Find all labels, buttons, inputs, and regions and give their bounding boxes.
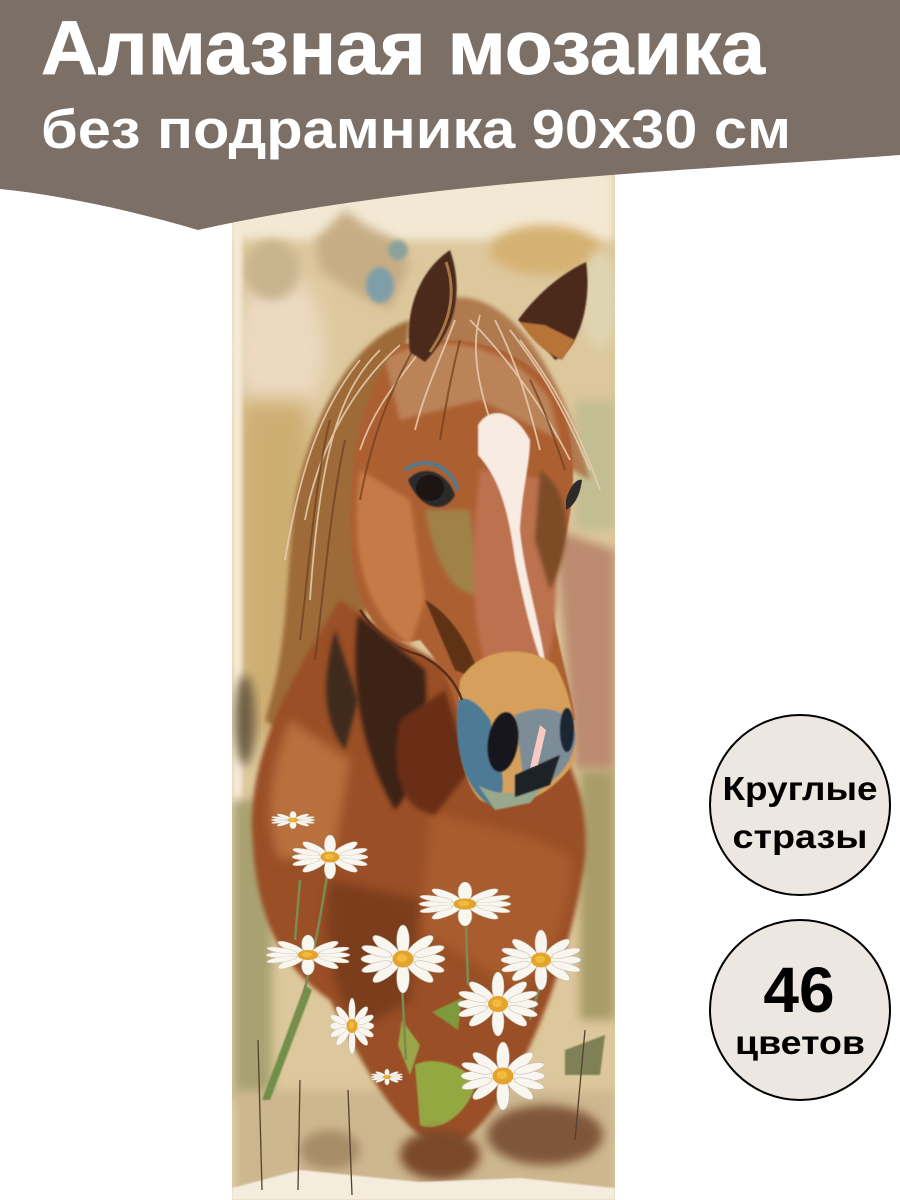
blaze	[478, 413, 547, 675]
badge: 46 colours: 46	[763, 954, 835, 1026]
left ear	[409, 250, 457, 362]
nostrils and mouth	[486, 711, 520, 773]
jaw line	[360, 610, 462, 700]
badge: 46 colours	[710, 920, 890, 1100]
foliage	[262, 985, 605, 1127]
painting background washes	[232, 170, 618, 1200]
title: Алмазная мозаика	[41, 6, 766, 91]
dark neck shadow	[355, 615, 426, 810]
right ear	[518, 262, 588, 360]
hair strands	[285, 315, 600, 600]
daisies	[265, 811, 582, 1110]
badge: round rhinestones: Круглые	[722, 770, 878, 807]
badge: 46 colours: цветов	[735, 1024, 865, 1061]
horse body	[252, 600, 586, 1150]
horse mane	[265, 320, 410, 760]
brown lower patches	[487, 1105, 603, 1165]
eye	[408, 471, 455, 507]
stems	[290, 870, 540, 1060]
horse head	[350, 340, 575, 730]
subtitle: без подрамника 90х30 см	[41, 98, 791, 160]
muzzle	[458, 651, 576, 805]
badge: round rhinestones: стразы	[732, 818, 868, 855]
banner	[0, 0, 900, 230]
badge: round rhinestones	[710, 715, 890, 895]
dark twigs	[258, 1030, 585, 1195]
panel: horse painting	[232, 170, 618, 1200]
